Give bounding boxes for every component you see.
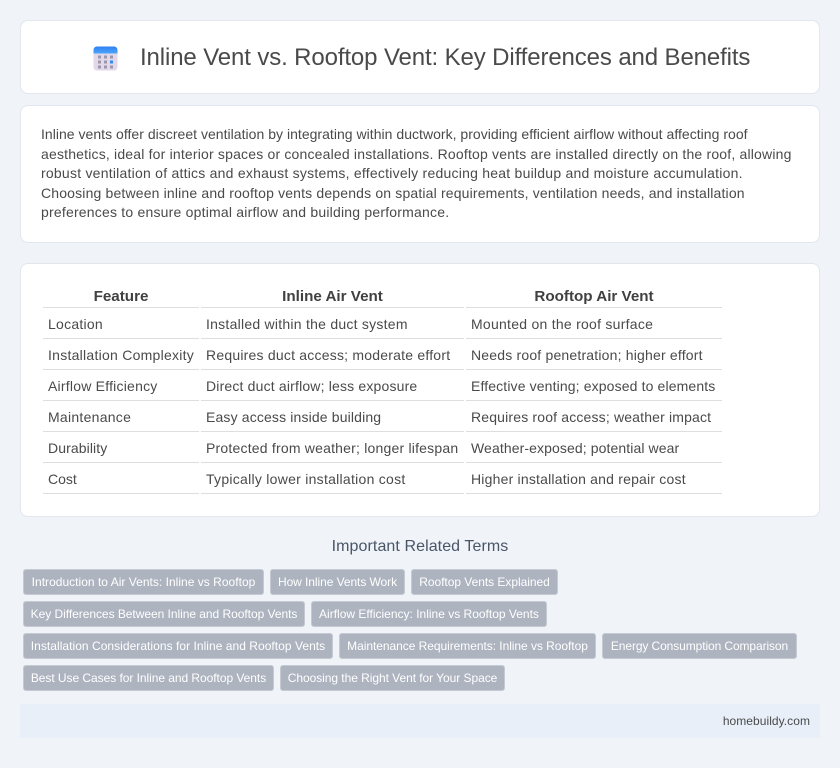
row: location: Installed within the duct system <box>206 316 408 332</box>
row: cost: Cost <box>48 471 77 487</box>
related term tags: Choosing the Right Vent for Your Space <box>288 671 497 685</box>
row: location: Location <box>48 316 103 332</box>
related term tags: How Inline Vents Work <box>278 575 397 589</box>
row: maintenance <box>43 409 722 432</box>
row: installation complexity <box>43 347 722 370</box>
row: airflow efficiency: Airflow Efficiency <box>48 378 158 394</box>
row: durability: Protected from weather; longer lifespan <box>206 440 458 456</box>
row: airflow efficiency <box>43 378 722 401</box>
icon: calendar <box>94 46 118 70</box>
related term tags: Energy Consumption Comparison <box>611 639 788 653</box>
text block: introduction: preferences to ensure optimal airflow and building performance. <box>41 204 449 220</box>
text block: introduction <box>41 126 792 220</box>
footer source text: homebuildy.com <box>723 714 810 728</box>
related term tags: Rooftop Vents Explained <box>419 575 550 589</box>
row: location: Mounted on the roof surface <box>471 316 653 332</box>
related term tags <box>23 569 797 691</box>
row: installation complexity: Installation Complexity <box>48 347 194 363</box>
row: maintenance: Requires roof access; weather impact <box>471 409 711 425</box>
comparison table <box>43 288 722 494</box>
row: cost: Higher installation and repair cost <box>471 471 686 487</box>
row: airflow efficiency: Effective venting; exposed to elements <box>471 378 715 394</box>
row: maintenance: Maintenance <box>48 409 131 425</box>
text block: introduction: robust ventilation of attics and exhaust systems, effectively reducing heat buildup and moisture accumulation. <box>41 165 743 181</box>
row: maintenance: Easy access inside building <box>206 409 381 425</box>
row: durability: Durability <box>48 440 107 456</box>
row: cost: Typically lower installation cost <box>206 471 406 487</box>
table header row: Feature <box>94 288 148 305</box>
text block: introduction: Inline vents offer discreet ventilation by integrating within ductwork, providing efficient airflow without affecting roof <box>41 126 748 142</box>
row: durability: Weather-exposed; potential wear <box>471 440 679 456</box>
row: installation complexity: Needs roof penetration; higher effort <box>471 347 703 363</box>
table header row: Rooftop Air Vent <box>534 288 654 305</box>
title: Inline Vent vs. Rooftop Vent: Key Differences and Benefits <box>140 44 750 71</box>
header panel <box>20 20 820 94</box>
panel: introduction <box>20 105 820 243</box>
related term tags: Key Differences Between Inline and Rooftop Vents <box>31 607 297 621</box>
text block: introduction: aesthetics, ideal for interior spaces or concealed installations. Rooftop vents are installed directly on the roof, allowing <box>41 146 792 162</box>
row: durability <box>43 440 722 463</box>
related term tags: Introduction to Air Vents: Inline vs Rooftop <box>32 575 255 589</box>
row: location <box>43 316 722 339</box>
text block: introduction: Choosing between inline and rooftop vents depends on spatial requirements, ventilation needs, and installation <box>41 184 745 200</box>
row: installation complexity: Requires duct access; moderate effort <box>206 347 450 363</box>
table header row <box>43 288 722 308</box>
row: airflow efficiency: Direct duct airflow; less exposure <box>206 378 417 394</box>
panel: comparison table <box>20 263 820 517</box>
related term tags: Installation Considerations for Inline and Rooftop Vents <box>31 639 325 653</box>
table header row: Inline Air Vent <box>282 288 383 305</box>
related term tags: Best Use Cases for Inline and Rooftop Vents <box>31 671 266 685</box>
footer bar <box>20 704 820 738</box>
related term tags: Maintenance Requirements: Inline vs Rooftop <box>347 639 588 653</box>
related term tags: Airflow Efficiency: Inline vs Rooftop Vents <box>319 607 539 621</box>
row: cost <box>43 471 722 494</box>
heading: important related terms: Important Related Terms <box>332 538 508 555</box>
